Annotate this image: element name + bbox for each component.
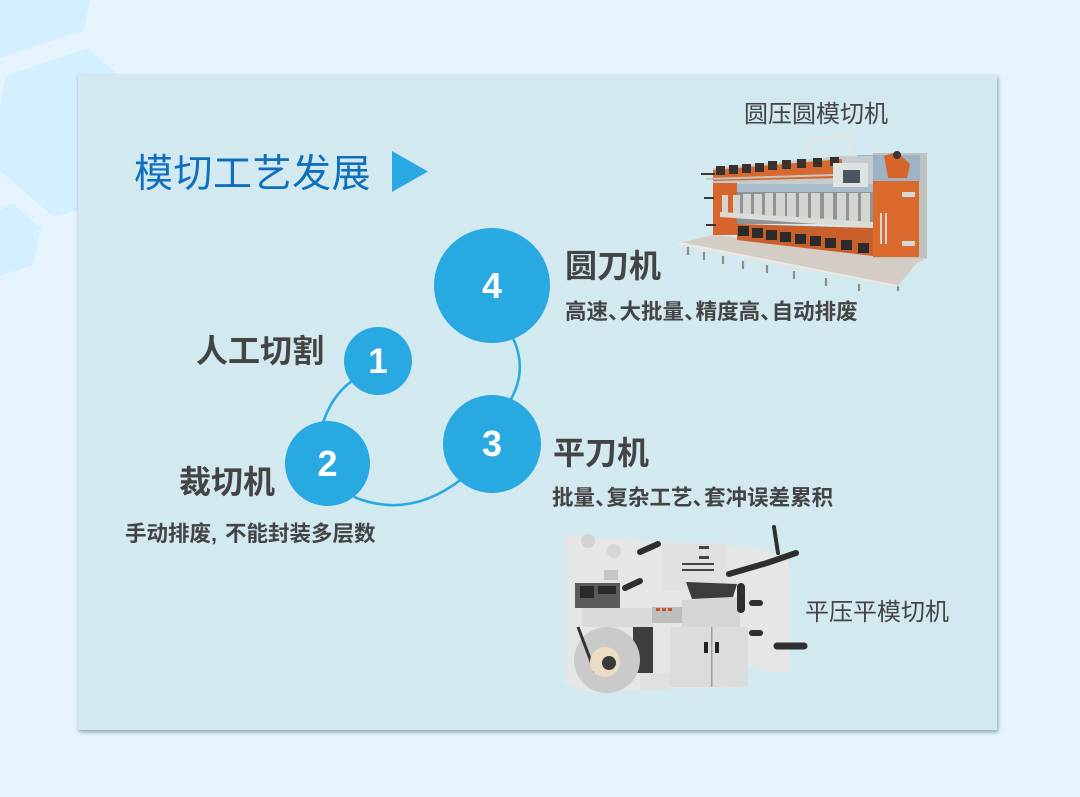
text: cutting machine description: , xyxy=(211,522,217,546)
heading: flatbed machine: 平刀机 xyxy=(553,435,649,471)
step 3 circle: 3 xyxy=(482,423,502,464)
step 2 circle xyxy=(285,421,370,506)
text: flatbed description: 、 xyxy=(595,486,617,510)
step 1 circle xyxy=(344,327,412,395)
text: rotary description: 、 xyxy=(760,300,782,324)
text: flatbed description: 批量 复杂工艺 套冲误差累积 xyxy=(552,486,833,510)
text: rotary description: 、 xyxy=(608,300,630,324)
title: 模切工艺发展 xyxy=(134,153,371,196)
step 2 circle: 2 xyxy=(317,443,338,484)
step 1 circle: 1 xyxy=(368,342,388,381)
text: rotary description: 、 xyxy=(684,300,706,324)
icon: title arrow xyxy=(392,151,428,192)
text: flatbed description: 、 xyxy=(693,486,714,510)
heading: rotary machine: 圆刀机 xyxy=(565,248,661,284)
step 4 circle: 4 xyxy=(482,265,502,306)
text: cutting machine description: 手动排废 不能封装多层数 xyxy=(125,522,376,546)
heading: manual cutting: 人工切割 xyxy=(196,333,324,369)
panel: main card xyxy=(78,75,997,730)
image: flatbed die cutting machine xyxy=(565,525,808,693)
text: rotary description: 高速 大批量 精度高 自动排废 xyxy=(565,300,858,324)
image: rotary die cutting machine xyxy=(676,134,927,291)
label: flatbed die cutter: 平压平模切机 xyxy=(805,599,949,626)
step 3 circle xyxy=(443,395,541,493)
label: rotary die cutter: 圆压圆模切机 xyxy=(744,101,888,128)
heading: cutting machine: 裁切机 xyxy=(179,464,275,500)
step 4 circle xyxy=(434,228,550,343)
